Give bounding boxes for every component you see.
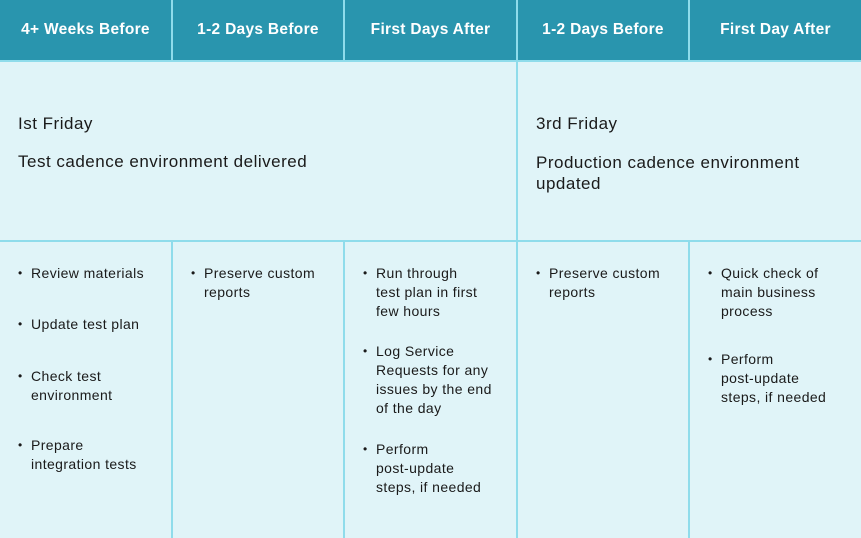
tasks: first days after: test plan in first: [376, 284, 477, 300]
tasks: first day after production: steps, if needed: [721, 389, 826, 405]
tasks: 4+ weeks before: Check test: [31, 368, 101, 384]
header: 1-2 Days Before: [173, 0, 343, 60]
header: 4+ Weeks Before: 4+ Weeks Before: [21, 21, 150, 38]
header: 1-2 Days Before (production): 1-2 Days Before: [542, 21, 664, 38]
tasks: first days after: post-update: [376, 460, 454, 476]
tasks: 1-2 days before: Preserve custom: [204, 265, 315, 281]
tasks: first days after: of the day: [376, 400, 442, 416]
tasks: first days after: steps, if needed: [376, 479, 481, 495]
tasks: first days after: few hours: [376, 303, 440, 319]
tasks: 4+ weeks before: Update test plan: [31, 316, 139, 332]
tasks: first day after production: Perform: [721, 351, 774, 367]
panel: test cadence milestone: Test cadence environment delivered: [18, 152, 307, 171]
tasks: first day after production: post-update: [721, 370, 799, 386]
panel: production cadence milestone: [518, 62, 861, 240]
tasks: first day after production: [690, 242, 861, 538]
tasks: first days after: Perform: [376, 441, 429, 457]
header: 1-2 Days Before (production): [518, 0, 688, 60]
header: First Days After: [345, 0, 516, 60]
tasks: first day after production: process: [721, 303, 773, 319]
tasks: 1-2 days before: [173, 242, 343, 538]
header: First Day After: [690, 0, 861, 60]
tasks: first day after production: main business: [721, 284, 816, 300]
tasks: first days after: [345, 242, 516, 538]
header: First Day After: First Day After: [720, 21, 831, 38]
tasks: first day after production: Quick check of: [721, 265, 818, 281]
panel: test cadence milestone: [0, 62, 516, 240]
tasks: 4+ weeks before: Review materials: [31, 265, 144, 281]
panel: production cadence milestone: updated: [536, 174, 601, 193]
tasks: 1-2 days before production: [518, 242, 688, 538]
header: First Days After: First Days After: [371, 21, 490, 38]
tasks: 4+ weeks before: [0, 242, 171, 538]
panel: production cadence milestone: 3rd Friday: [536, 114, 618, 133]
tasks: 4+ weeks before: environment: [31, 387, 112, 403]
tasks: first days after: Run through: [376, 265, 457, 281]
tasks: 1-2 days before production: Preserve custom: [549, 265, 660, 281]
tasks: first days after: Log Service: [376, 343, 454, 359]
tasks: 4+ weeks before: integration tests: [31, 456, 137, 472]
tasks: 1-2 days before production: reports: [549, 284, 595, 300]
panel: production cadence milestone: Production cadence environment: [536, 153, 800, 172]
panel: test cadence milestone: Ist Friday: [18, 114, 93, 133]
tasks: first days after: Requests for any: [376, 362, 488, 378]
tasks: 4+ weeks before: Prepare: [31, 437, 84, 453]
header: 1-2 Days Before: 1-2 Days Before: [197, 21, 319, 38]
tasks: first days after: issues by the end: [376, 381, 492, 397]
tasks: 1-2 days before: reports: [204, 284, 250, 300]
header: 4+ Weeks Before: [0, 0, 171, 60]
